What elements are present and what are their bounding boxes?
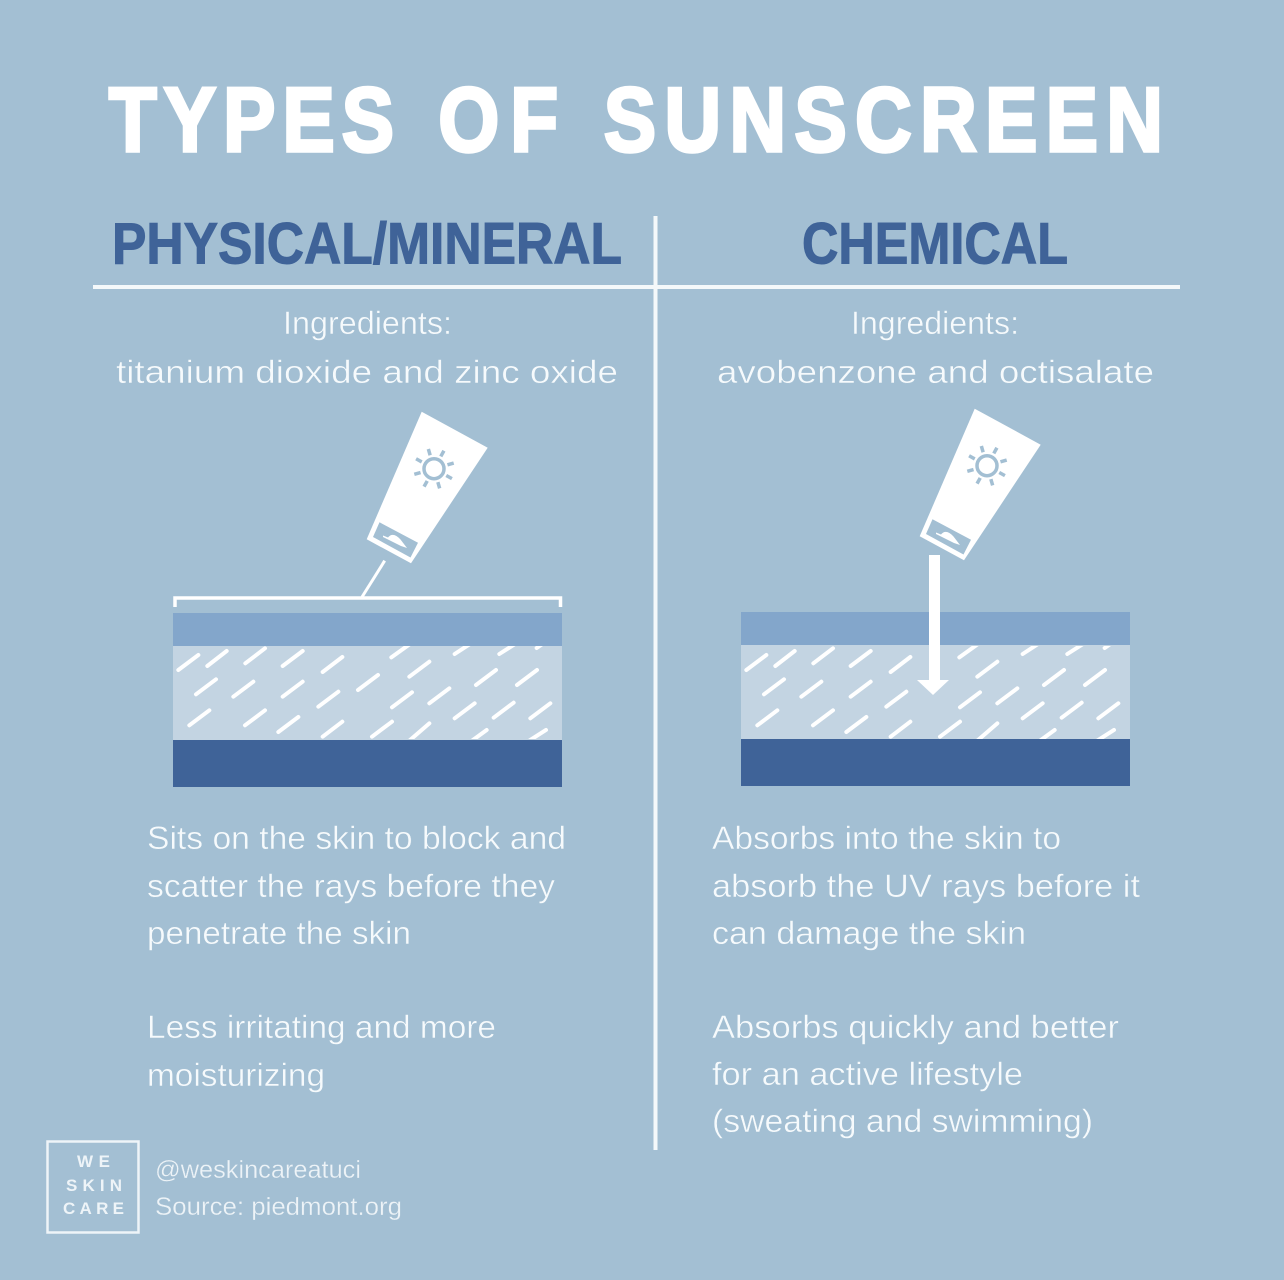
text block: physical description xyxy=(147,820,566,951)
bracket: sits on top of the skin xyxy=(175,561,560,607)
text block: chemical description xyxy=(712,820,1140,951)
arrow: absorbs into the skin xyxy=(917,555,949,695)
logo: we skin care: SKIN xyxy=(66,1176,122,1195)
logo: we skin care: CARE xyxy=(63,1199,124,1218)
text block: physical benefit xyxy=(147,1009,496,1093)
text block: physical description: scatter the rays before they xyxy=(147,868,555,904)
heading: physical/mineral: PHYSICAL/MINERAL xyxy=(112,212,622,276)
text block: physical description: penetrate the skin xyxy=(147,915,411,951)
text block: chemical benefit: Absorbs quickly and better xyxy=(712,1009,1119,1045)
text block: chemical ingredients: Ingredients: xyxy=(851,305,1019,341)
text block: chemical ingredients xyxy=(717,305,1154,390)
text block: chemical benefit: for an active lifestyle xyxy=(712,1056,1023,1092)
icon: sunscreen tube, physical xyxy=(367,412,488,563)
footer: handle and source: Source: piedmont.org xyxy=(155,1193,402,1221)
footer: handle and source: @weskincareatuci xyxy=(155,1156,361,1184)
skin layers diagram: chemical xyxy=(741,612,1130,786)
text block: chemical benefit xyxy=(712,1009,1119,1139)
text block: physical ingredients: titanium dioxide and zinc oxide xyxy=(116,354,618,390)
title xyxy=(109,68,1163,170)
text block: physical benefit: Less irritating and more xyxy=(147,1009,496,1045)
text block: chemical description: absorb the UV rays before it xyxy=(712,868,1140,904)
skin layers diagram: physical xyxy=(173,613,562,787)
text block: physical benefit: moisturizing xyxy=(147,1057,325,1093)
text block: physical description: Sits on the skin to block and xyxy=(147,820,566,856)
icon: sunscreen tube, chemical xyxy=(920,409,1041,560)
text block: chemical benefit: (sweating and swimming) xyxy=(712,1103,1093,1139)
heading: chemical: CHEMICAL xyxy=(802,212,1068,276)
text block: chemical description: Absorbs into the skin to xyxy=(712,820,1061,856)
text block: physical ingredients xyxy=(116,305,618,390)
title: TYPES xyxy=(109,68,394,170)
title: SUNSCREEN xyxy=(604,68,1163,170)
text block: physical ingredients: Ingredients: xyxy=(283,305,452,341)
title: OF xyxy=(438,68,558,170)
logo: we skin care: WE xyxy=(77,1152,110,1171)
text block: chemical ingredients: avobenzone and octisalate xyxy=(717,354,1154,390)
text block: chemical description: can damage the skin xyxy=(712,915,1026,951)
logo: we skin care xyxy=(48,1142,138,1232)
footer: handle and source xyxy=(155,1156,402,1221)
